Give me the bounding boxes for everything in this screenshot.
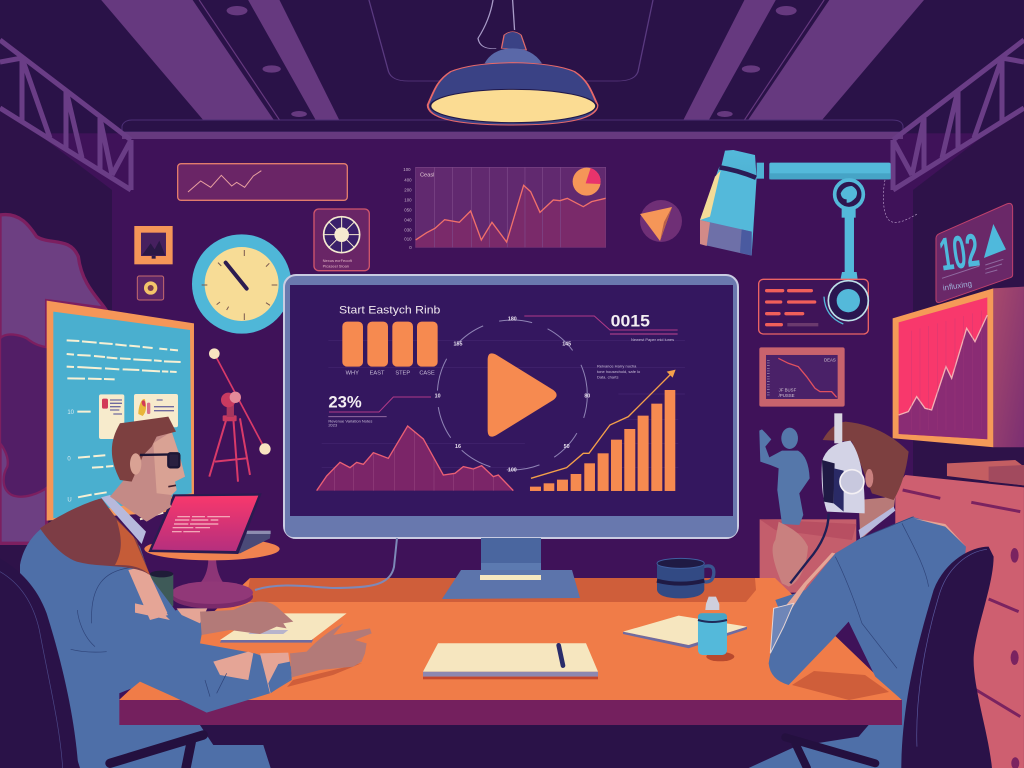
wall line chart: 030 [404, 227, 412, 232]
green mug [150, 571, 173, 607]
ring tick labels: 80 [584, 394, 590, 400]
dashed ring around play button [437, 320, 587, 470]
ring tick labels: 16 [455, 444, 461, 450]
tile captions: EAST [370, 370, 385, 376]
cyan desk-lamp arm [700, 150, 918, 282]
right roof truss [893, 40, 1024, 190]
note text [597, 363, 641, 380]
background wall blob left [0, 215, 105, 543]
area chart [317, 426, 513, 491]
ceiling ledge [122, 120, 903, 139]
wall badge: globe: Picaseel Sloan [323, 263, 349, 268]
right man hand [773, 522, 808, 587]
wall icon: small camera badge [137, 276, 164, 300]
blue figurine statue [759, 428, 810, 525]
wall line chart [403, 167, 606, 250]
wall line chart: 200 [404, 187, 412, 192]
right man hair [823, 422, 909, 500]
wall line chart: 400 [404, 177, 412, 182]
control panel with dial [759, 279, 868, 334]
main monitor [284, 275, 738, 538]
poster card left [99, 394, 124, 439]
monitor screen [290, 285, 733, 516]
right man shirt [749, 517, 966, 768]
ring tick labels: 180 [508, 316, 517, 322]
wall poster: text sheet: 0 [67, 457, 71, 463]
desk [119, 578, 902, 768]
ring tick labels [435, 316, 590, 473]
wall line chart: Ceasl [420, 173, 434, 179]
monitor cable [255, 538, 397, 590]
laptop [148, 493, 271, 554]
wall icon: picture frame [134, 226, 173, 264]
left man [20, 495, 372, 768]
metric card: 102: influxing [942, 279, 973, 293]
callout 23% [328, 393, 431, 428]
spray bottle [698, 597, 734, 661]
small notepad under hand [220, 613, 347, 643]
ring tick labels: 50 [564, 444, 570, 450]
wall line chart: 0 [409, 245, 412, 250]
wall clock [192, 234, 291, 334]
play triangle [488, 353, 557, 437]
right notebook [623, 616, 747, 648]
ceiling [0, 0, 1024, 133]
wall line chart: 010 [404, 237, 412, 242]
monitor stand neck [481, 538, 541, 576]
callout 23%: 2023 [328, 423, 338, 428]
top wall panel: sparkline [178, 164, 347, 200]
callout 23%: Revenue Variation Notes [328, 418, 372, 423]
coffee mug [657, 558, 714, 598]
ring tick labels: 100 [508, 467, 517, 473]
wall mini stock chart: DEAS [824, 357, 836, 362]
right man [749, 413, 966, 768]
ring tick labels: 155 [454, 342, 462, 348]
right office chair [785, 547, 994, 768]
tripod telescope [209, 348, 271, 482]
side wall right [913, 105, 1024, 768]
wall line chart: 040 [404, 217, 412, 222]
left roof truss [0, 40, 131, 190]
callout 0015: Newest Paper mid lunes [631, 337, 674, 342]
left man pointing hand [290, 623, 372, 677]
wall badge: globe: Nexus ecrFeooft [323, 258, 353, 263]
metric card: 102: 102 [936, 224, 982, 281]
left man shirt [20, 500, 292, 768]
left man head [110, 417, 185, 522]
wall poster: text sheet [47, 301, 194, 521]
tile captions: CASE [419, 370, 435, 376]
note text: Relvance Harry nucha [597, 363, 637, 368]
right headset [790, 413, 865, 583]
note text: Data. charts [597, 375, 618, 380]
orange tile bars [342, 322, 438, 367]
hanging ceiling lamp [428, 0, 597, 125]
wall poster: text sheet: U [67, 497, 72, 503]
wall badge: globe [314, 209, 369, 271]
tile captions: WHY [346, 370, 359, 376]
right man neck [859, 497, 895, 540]
callout 0015 [524, 311, 678, 342]
screen title: Start Eastych Rinb [339, 305, 440, 317]
wall mini stock chart [759, 347, 845, 407]
pedestal with figurine [759, 428, 856, 593]
wall mini stock chart: JF BUSF [779, 388, 797, 393]
wall chart screen, right [893, 287, 1024, 447]
right man ear [865, 469, 873, 488]
wall line chart: 100 [404, 197, 412, 202]
callout 0015: 0015 [611, 311, 650, 330]
left man collar and vest [40, 498, 150, 575]
filing cabinet [895, 460, 1024, 768]
ring tick labels: 145 [562, 342, 571, 348]
side wall left [0, 105, 112, 768]
forearm cuff near laptop [167, 608, 207, 643]
left man mouse hand [200, 602, 293, 635]
wall line chart: 050 [404, 207, 412, 212]
note text: tone housechold, safe lo [597, 369, 641, 374]
metric card: 102 [936, 203, 1013, 303]
wall badge: pie triangle [640, 200, 682, 242]
monitor stand base [442, 570, 580, 599]
center notepad with pen [423, 643, 598, 679]
bar chart [530, 390, 675, 491]
poster card right [134, 394, 178, 427]
left office chair [0, 558, 203, 768]
sleeve cuff [260, 653, 292, 693]
tile captions: STEP [395, 370, 410, 376]
wall poster: text sheet: 10 [67, 410, 75, 416]
ring tick labels: 10 [435, 394, 441, 400]
left side table with laptop [144, 493, 280, 609]
tile captions [346, 370, 435, 376]
callout 23%: 23% [328, 393, 362, 412]
trend arrow [531, 370, 676, 478]
wall line chart: 100 [403, 167, 411, 172]
wall mini stock chart: /PUSSE [779, 393, 795, 398]
